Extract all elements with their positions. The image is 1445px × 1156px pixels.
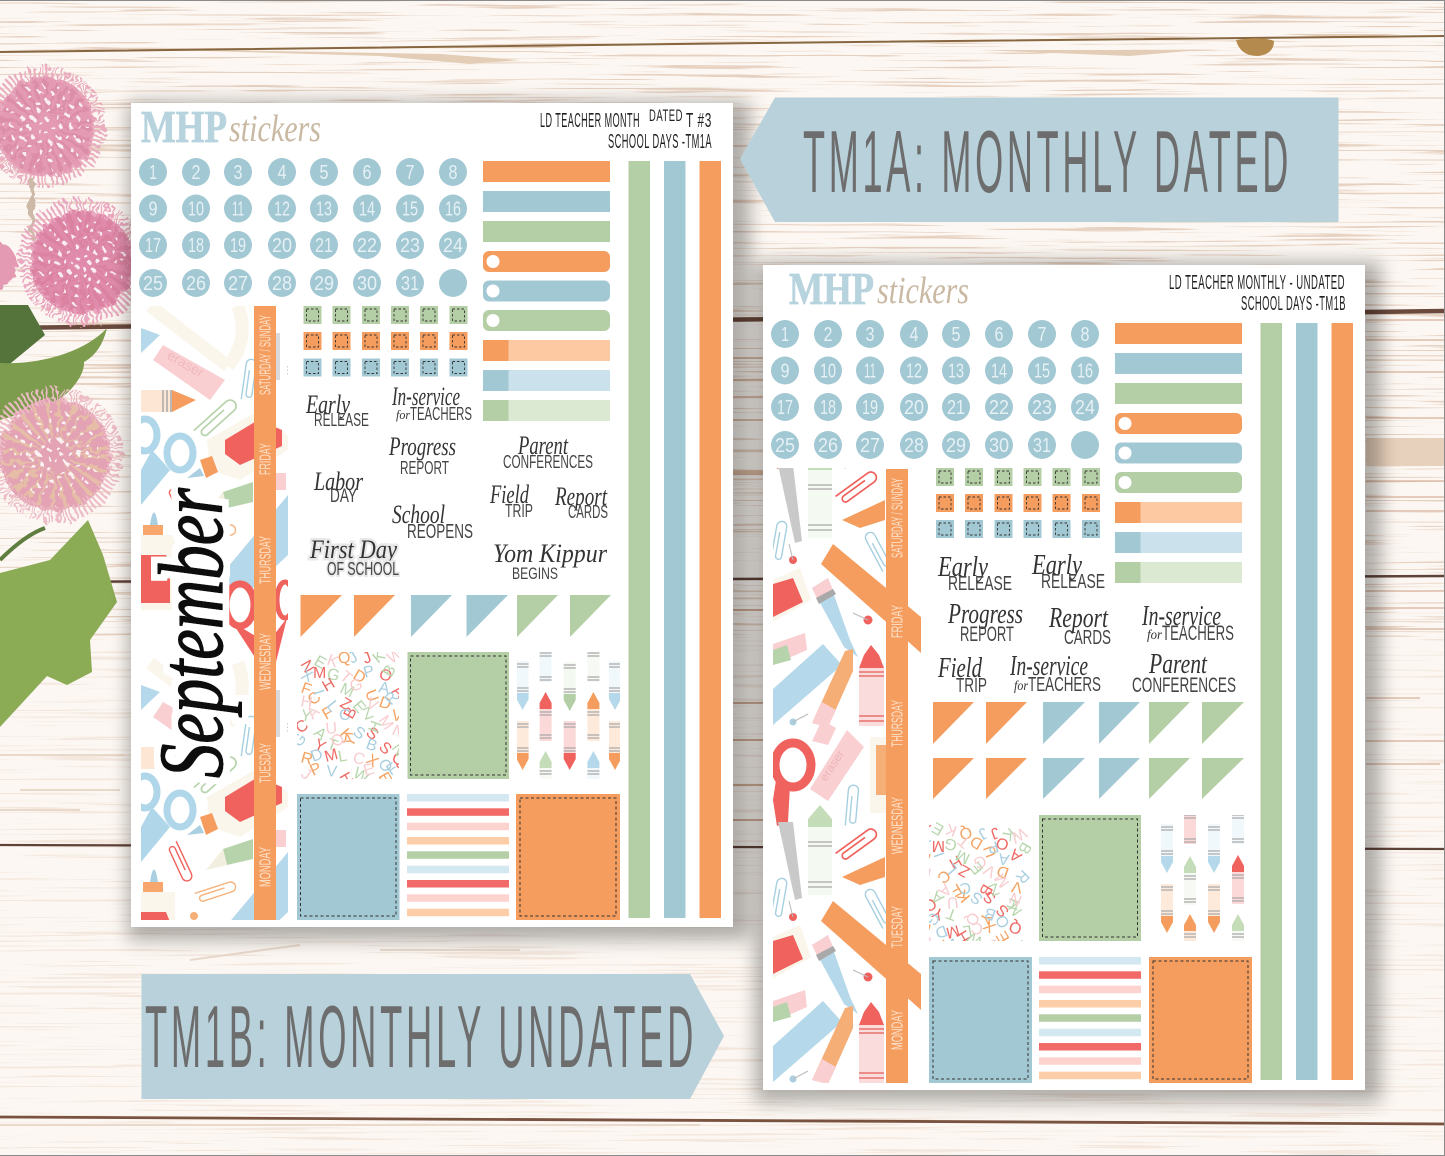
script labels: Early <box>305 390 350 419</box>
date circles: 6 <box>362 162 372 184</box>
flag triangles <box>300 595 611 637</box>
script labels: Early <box>937 552 988 583</box>
checkbox squares <box>304 306 468 376</box>
sheet TM1B <box>763 263 1365 1090</box>
script labels: TEACHERS <box>410 404 472 424</box>
script labels: In-service <box>1141 601 1221 632</box>
date circles: 11 <box>232 198 244 220</box>
script labels: Report <box>554 482 608 511</box>
date circles: 2 <box>192 162 200 184</box>
date circles: 9 <box>148 198 158 220</box>
date circles: 26 <box>186 273 206 295</box>
date circles <box>139 158 467 297</box>
date circles: 12 <box>274 198 290 220</box>
script labels: Field <box>937 653 983 684</box>
date circles: 12 <box>906 360 922 382</box>
day strip: SATURDAY / SUNDAY <box>890 478 906 558</box>
script labels: DAY <box>330 486 357 507</box>
script labels: First Day <box>309 535 397 564</box>
flower 1 <box>0 73 99 181</box>
date circles: 4 <box>910 324 918 346</box>
script labels: RELEASE <box>314 410 369 430</box>
logo <box>789 263 969 314</box>
date circles: 19 <box>230 235 246 257</box>
script labels: TEACHERS <box>1028 674 1101 696</box>
date circles: 3 <box>866 324 874 346</box>
date circles: 27 <box>860 435 880 457</box>
date circles <box>771 320 1099 459</box>
logo: stickers <box>877 270 969 312</box>
script labels: Progress <box>947 599 1023 630</box>
checkbox squares <box>936 468 1100 538</box>
date circles: 22 <box>989 397 1009 419</box>
sheet shadow TM1B <box>755 262 1381 1102</box>
orange dashed box <box>1149 957 1252 1083</box>
sheet title: T #3 <box>686 110 712 132</box>
school supplies pattern <box>773 468 921 1083</box>
blue dashed box <box>929 957 1032 1083</box>
date circles: 21 <box>947 397 965 419</box>
date circles: 7 <box>406 162 414 184</box>
day strip: THURSDAY <box>890 700 906 747</box>
date circles: 18 <box>820 397 836 419</box>
day strip <box>886 469 908 1083</box>
date circles: 15 <box>402 198 418 220</box>
date circles: 24 <box>1075 397 1095 419</box>
date circles: 28 <box>272 273 292 295</box>
date circles: 3 <box>234 162 242 184</box>
script labels: CONFERENCES <box>503 452 593 472</box>
date circles: 18 <box>188 235 204 257</box>
flower 2 <box>0 178 138 318</box>
day strip: FRIDAY <box>890 605 906 638</box>
date circles: 20 <box>904 397 924 419</box>
script labels: for <box>396 407 411 422</box>
date circles: 22 <box>357 235 377 257</box>
eraser word: eraser <box>164 347 207 381</box>
date circles: 5 <box>952 324 960 346</box>
script labels: Progress <box>388 432 456 461</box>
script labels <box>937 550 1236 697</box>
red scissors <box>226 582 293 662</box>
date circles: 30 <box>989 435 1009 457</box>
crayon pattern <box>517 652 620 779</box>
date circles: 6 <box>994 324 1004 346</box>
day strip: MONDAY <box>258 847 274 887</box>
striped box <box>407 794 509 916</box>
eraser word: eraser <box>817 747 847 784</box>
date circles: 26 <box>818 435 838 457</box>
sheet title: DATED <box>649 106 683 125</box>
leaves <box>0 305 117 727</box>
sheet title: LD TEACHER MONTH <box>540 110 640 132</box>
sheet title <box>1169 272 1346 315</box>
script labels: Early <box>1031 550 1082 581</box>
date circles: 9 <box>780 360 790 382</box>
logo <box>141 101 321 152</box>
script labels: for <box>1014 679 1028 694</box>
green dashed box <box>408 652 509 779</box>
logo: MHP <box>789 263 874 314</box>
date circles: 2 <box>824 324 832 346</box>
day strip: SATURDAY / SUNDAY <box>258 315 274 395</box>
date circles: 16 <box>445 198 461 220</box>
alphabet pattern: EKGBMEYZAHTNLW <box>919 818 1034 950</box>
date circles: 27 <box>228 273 248 295</box>
script labels: CARDS <box>1064 627 1111 649</box>
date circles: 1 <box>781 324 789 346</box>
script labels: In-service <box>391 382 460 411</box>
alphabet pattern: QDFUCDFVKYRXPE <box>917 823 1024 955</box>
script labels: Yom Kippur <box>493 539 608 568</box>
day strip <box>254 306 276 920</box>
date circles: 28 <box>904 435 924 457</box>
blue dashed box <box>297 794 400 920</box>
text: TM1B: MONTHLY UNDATED <box>145 987 697 1086</box>
day strip: WEDNESDAY <box>258 633 274 690</box>
date circles: 15 <box>1034 360 1050 382</box>
header bars <box>1115 323 1242 583</box>
logo: stickers <box>229 108 321 150</box>
script labels: REPORT <box>960 623 1014 646</box>
alphabet pattern: EKGBMEYZAHTNLW <box>299 647 408 787</box>
date circles: 23 <box>400 235 420 257</box>
day strip: THURSDAY <box>258 536 274 584</box>
script labels: TEACHERS <box>1162 622 1234 645</box>
flag triangles <box>933 702 1244 799</box>
long washi strips <box>1260 323 1353 1080</box>
sheet shadow TM1A <box>128 102 750 940</box>
date circles: 14 <box>359 198 375 220</box>
school supplies pattern <box>141 306 288 920</box>
date circles: 13 <box>948 360 964 382</box>
date circles: 5 <box>320 162 328 184</box>
flower 3 <box>0 395 115 515</box>
orange dashed box <box>516 794 620 920</box>
date circles: 23 <box>1032 397 1052 419</box>
date circles: 29 <box>946 435 966 457</box>
striped box <box>1039 957 1141 1079</box>
date circles: 10 <box>820 360 836 382</box>
script labels: BEGINS <box>512 564 558 583</box>
sheet TM1A <box>131 101 733 967</box>
date circles: 10 <box>188 198 204 220</box>
date circles: 16 <box>1077 360 1093 382</box>
banner TM1A <box>740 98 1338 222</box>
green dashed box <box>1039 815 1141 941</box>
alphabet pattern: KWTGHVAMUNQCJE <box>918 819 1030 954</box>
alphabet pattern: JXPIALRCSGBDOVF <box>917 824 1032 955</box>
day strip: TUESDAY <box>258 743 274 783</box>
day strip: TUESDAY <box>890 906 906 948</box>
date circles: 21 <box>315 235 333 257</box>
script labels: Parent <box>1148 649 1208 680</box>
day strip: MONDAY <box>890 1010 906 1050</box>
day strip: WEDNESDAY <box>890 797 906 854</box>
date circles: 25 <box>775 435 795 457</box>
script labels: CARDS <box>568 502 608 522</box>
alphabet pattern: JXPIALRCSGBDOVF <box>289 649 402 781</box>
script labels: In-service <box>1009 651 1088 682</box>
script labels: CONFERENCES <box>1132 674 1236 697</box>
date circles: 29 <box>314 273 334 295</box>
date circles: 8 <box>448 162 458 184</box>
September title: September <box>140 487 242 778</box>
script labels: REPORT <box>400 458 449 478</box>
date circles: 24 <box>443 235 463 257</box>
script labels: Labor <box>313 467 364 496</box>
header bars <box>483 161 610 421</box>
date circles: 31 <box>401 273 419 295</box>
date circles: 11 <box>864 360 876 382</box>
date circles: 17 <box>145 235 161 257</box>
date circles: 13 <box>316 198 332 220</box>
sheet title <box>540 106 712 153</box>
alphabet pattern: NJMOHAZBCSYSMQH <box>915 815 1026 946</box>
date circles: 7 <box>1038 324 1046 346</box>
script labels: for <box>1147 628 1163 643</box>
script labels: RELEASE <box>948 573 1012 595</box>
script labels: TRIP <box>505 501 533 521</box>
day strip: FRIDAY <box>258 443 274 475</box>
script labels: Report <box>1048 603 1109 634</box>
date circles: 20 <box>272 235 292 257</box>
script labels: Field <box>489 480 530 509</box>
banner TM1B <box>142 974 724 1099</box>
script labels: TRIP <box>956 675 987 697</box>
script labels: REOPENS <box>407 521 473 543</box>
date circles: 17 <box>777 397 793 419</box>
alphabet pattern: KWTGHVAMUNQCJE <box>298 645 407 784</box>
date circles: 14 <box>991 360 1007 382</box>
date circles: 31 <box>1033 435 1051 457</box>
date circles: 30 <box>357 273 377 295</box>
alphabet pattern: QDFUCDFVKYRXPE <box>299 649 404 787</box>
script labels <box>305 382 608 583</box>
date circles: 4 <box>278 162 286 184</box>
date circles: 25 <box>143 273 163 295</box>
long washi strips <box>628 161 721 918</box>
date circles: 19 <box>862 397 878 419</box>
sheet TM1A: SCHOOL DAYS -TM1A <box>608 131 712 153</box>
script labels: School <box>392 500 445 529</box>
script labels: Parent <box>517 431 569 460</box>
crayon pattern <box>1161 815 1244 941</box>
logo: MHP <box>141 101 227 152</box>
date circles: 8 <box>1080 324 1090 346</box>
script labels: RELEASE <box>1041 571 1105 593</box>
pink eraser pieces <box>171 730 172 731</box>
script labels: OF SCHOOL <box>327 559 399 579</box>
date circles: 1 <box>149 162 157 184</box>
alphabet pattern: NJMOHAZBCSYSMQH <box>293 649 408 788</box>
